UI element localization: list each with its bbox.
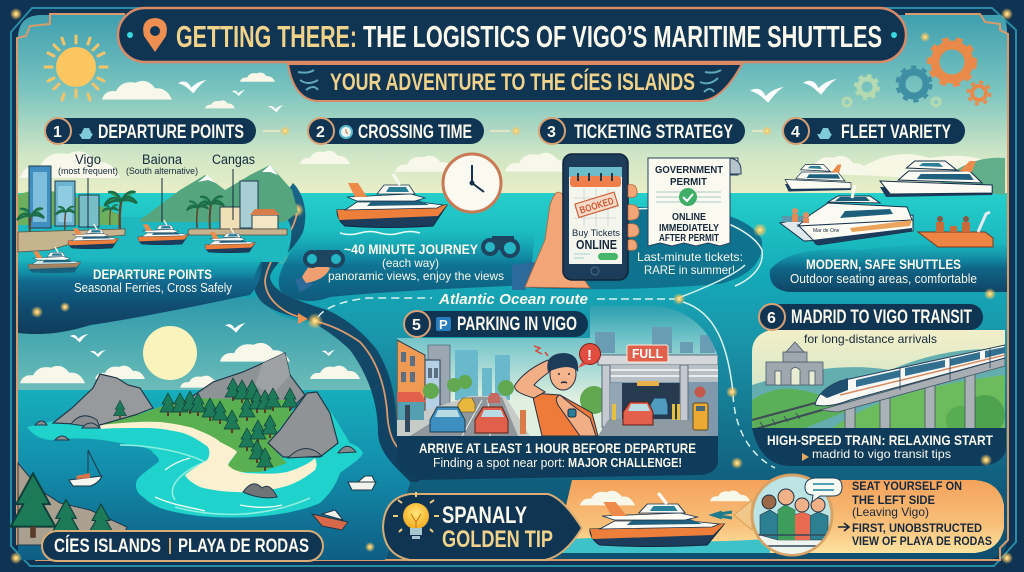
heading 5: parking in Vigo: PARKING IN VIGO bbox=[457, 314, 577, 335]
panel 3: phone and hand: Buy Tickets bbox=[572, 228, 620, 239]
icon: map pin bbox=[143, 18, 167, 52]
heading 1: departure points: 1 bbox=[53, 124, 62, 141]
train bbox=[815, 345, 1005, 406]
panel 2: ferry and clock scene bbox=[279, 154, 535, 301]
panel 6: train scene bbox=[752, 330, 1005, 435]
route label: Atlantic Ocean route bbox=[438, 291, 588, 308]
panel 6: caption: madrid to vigo transit tips bbox=[812, 447, 951, 461]
icon: check bbox=[679, 188, 697, 206]
icon: gears bbox=[843, 39, 990, 106]
island label: PLAYA DE RODAS bbox=[178, 536, 309, 557]
panel 1: labels: Cangas bbox=[212, 152, 255, 167]
panel 6: caption bbox=[767, 332, 993, 461]
heading 3: ticketing strategy: TICKETING STRATEGY bbox=[574, 122, 733, 143]
panel 5: caption: Finding a spot near port: bbox=[433, 455, 565, 470]
heading 2: crossing time: 2 bbox=[316, 124, 325, 141]
label: golden tip bbox=[383, 492, 582, 560]
connectors bbox=[263, 126, 772, 136]
Cangas town bbox=[240, 181, 258, 228]
heading 4: fleet variety: 4 bbox=[791, 124, 800, 141]
title banner: GETTING THERE: bbox=[176, 19, 357, 54]
route: river and path bbox=[254, 183, 420, 482]
panel 4: fleet boats bbox=[770, 161, 1007, 292]
foreground trees bbox=[18, 463, 127, 545]
beach bbox=[100, 422, 316, 492]
panel 6: caption: HIGH-SPEED TRAIN: RELAXING START bbox=[767, 432, 993, 448]
subtitle banner bbox=[288, 64, 742, 101]
panel 6: caption base bbox=[752, 428, 1006, 466]
heading 2: crossing time: CROSSING TIME bbox=[358, 122, 472, 143]
garage bbox=[602, 382, 718, 436]
panel 1: labels: Vigo bbox=[75, 152, 101, 167]
tracks bbox=[752, 403, 822, 430]
stress marks bbox=[534, 346, 548, 356]
panel 5: parking scene bbox=[397, 305, 718, 436]
icon: binoculars left bbox=[295, 250, 343, 292]
tip text: SEAT YOURSELF ON bbox=[852, 479, 962, 493]
panel 1: labels: (South alternative) bbox=[126, 166, 198, 177]
seagulls bbox=[178, 79, 837, 112]
panel 3: caption: Last-minute tickets: bbox=[637, 250, 743, 264]
icon: sun bbox=[45, 36, 107, 100]
heading 4: fleet variety bbox=[783, 118, 965, 144]
panel 3: government permit: GOVERNMENT bbox=[655, 164, 724, 176]
heading 4: fleet variety: FLEET VARIETY bbox=[841, 122, 951, 143]
ferries bbox=[68, 224, 119, 249]
heading 5: parking in Vigo: 5 bbox=[412, 317, 421, 334]
awning bbox=[397, 392, 426, 402]
heading 6: Madrid to Vigo transit: 6 bbox=[767, 310, 776, 327]
panel 4: caption: Outdoor seating areas, comfortable bbox=[790, 272, 977, 286]
panel 4: caption bbox=[790, 256, 977, 286]
panel 3: government permit: PERMIT bbox=[670, 176, 708, 188]
distant cars bbox=[458, 398, 475, 412]
icon: light bulb bbox=[393, 492, 439, 539]
left rocks bbox=[53, 374, 153, 425]
street and sidewalks bbox=[397, 396, 530, 436]
turquoise shallows bbox=[27, 410, 363, 518]
panel 1: labels: Baiona bbox=[142, 152, 182, 167]
quays bbox=[18, 229, 125, 252]
pine trees bbox=[225, 378, 241, 401]
tip text: THE LEFT SIDE bbox=[852, 493, 935, 507]
island label: CÍES ISLANDS bbox=[54, 535, 161, 557]
heading 5: parking in Vigo bbox=[404, 311, 588, 337]
panel: golden tip banner bbox=[555, 475, 1004, 560]
alert bubble bbox=[578, 344, 600, 368]
panel 1: labels: DEPARTURE POINTS bbox=[93, 266, 212, 282]
panel 5: caption bbox=[419, 440, 696, 470]
heading 3: ticketing strategy: 3 bbox=[547, 124, 556, 141]
tip text bbox=[838, 479, 992, 548]
green land bbox=[100, 398, 292, 472]
panel 2: caption bbox=[328, 241, 504, 283]
stressed man bbox=[515, 353, 598, 436]
Puerta de Alcala bbox=[766, 342, 823, 385]
panel: island scene bbox=[11, 296, 410, 560]
skyline bbox=[595, 327, 715, 353]
panel 1: labels: Seasonal Ferries, Cross Safely bbox=[74, 281, 233, 295]
panel 4: caption: MODERN, SAFE SHUTTLES bbox=[806, 256, 961, 272]
panel 3: phone and hand: ONLINE bbox=[576, 238, 617, 252]
tip text: FIRST, UNOBSTRUCTED bbox=[852, 521, 982, 535]
passengers circle bbox=[750, 475, 835, 560]
heading 2: crossing time bbox=[308, 118, 484, 144]
bystanders bbox=[520, 410, 526, 434]
red car bbox=[475, 407, 508, 433]
sun over the island bbox=[143, 326, 197, 380]
panel 3: government permit: AFTER PERMIT bbox=[659, 233, 719, 244]
panel 5: caption base bbox=[397, 436, 718, 480]
heading 6: Madrid to Vigo transit bbox=[759, 304, 983, 330]
arrows bbox=[713, 512, 732, 518]
motor boats bbox=[348, 482, 376, 490]
heading 5: parking in Vigo: P bbox=[439, 317, 448, 332]
viaduct bbox=[845, 374, 975, 430]
heading 1: departure points: DEPARTURE POINTS bbox=[98, 122, 244, 143]
panel 2: caption: ~40 MINUTE JOURNEY bbox=[344, 241, 479, 257]
panel 2: caption: panoramic views, enjoy the views bbox=[328, 269, 504, 283]
panel 1: labels: (most frequent) bbox=[58, 166, 118, 177]
panel 5: caption: ARRIVE AT LEAST 1 HOUR BEFORE DEPARTURE bbox=[419, 440, 696, 456]
panel 3: caption bbox=[637, 250, 743, 277]
panel 1: labels bbox=[58, 152, 255, 295]
blue car bbox=[430, 407, 465, 432]
label: golden tip: SPANALY bbox=[442, 502, 527, 529]
panel 3: government permit bbox=[648, 158, 741, 246]
panel 3: government permit: ONLINE bbox=[672, 211, 706, 223]
panel 1: departure points scene bbox=[17, 165, 298, 273]
panel 3: government permit: IMMEDIATELY bbox=[659, 222, 719, 234]
speech bubble bbox=[805, 478, 842, 502]
subtitle banner: YOUR ADVENTURE TO THE CÍES ISLANDS bbox=[330, 68, 695, 96]
tip text: (Leaving Vigo) bbox=[852, 505, 929, 519]
island label bbox=[42, 531, 323, 561]
label: golden tip: GOLDEN TIP bbox=[442, 526, 553, 553]
route: white dashed line bbox=[318, 265, 775, 468]
panel 6: caption: for long-distance arrivals bbox=[804, 332, 937, 346]
tip text: VIEW OF PLAYA DE RODAS bbox=[852, 534, 992, 548]
front rock bbox=[268, 392, 338, 457]
Vigo buildings bbox=[29, 166, 51, 228]
heading 1: departure points bbox=[45, 118, 256, 144]
panel 3: caption: RARE in summer! bbox=[644, 263, 735, 277]
booked stamp: BOOKED bbox=[579, 196, 615, 217]
panel 2: caption: (each way) bbox=[382, 256, 439, 270]
panel 5: caption: MAJOR CHALLENGE! bbox=[568, 455, 682, 470]
icon: binoculars right bbox=[483, 236, 535, 290]
sailboat bbox=[69, 476, 102, 486]
back mountains bbox=[187, 353, 305, 410]
heading 3: ticketing strategy bbox=[539, 118, 745, 144]
street trees bbox=[423, 383, 439, 399]
panel 1: caption blob bbox=[18, 258, 262, 334]
FULL sign: FULL bbox=[632, 346, 663, 361]
icon: clock bbox=[443, 154, 501, 212]
panel 4: fleet boats: Mar de One bbox=[813, 228, 840, 234]
panel 3: phone and hand bbox=[525, 154, 639, 288]
title banner bbox=[118, 8, 906, 62]
panel 3: caption blob bbox=[530, 207, 762, 289]
ferry bbox=[590, 493, 724, 546]
alert bubble: ! bbox=[587, 347, 592, 364]
